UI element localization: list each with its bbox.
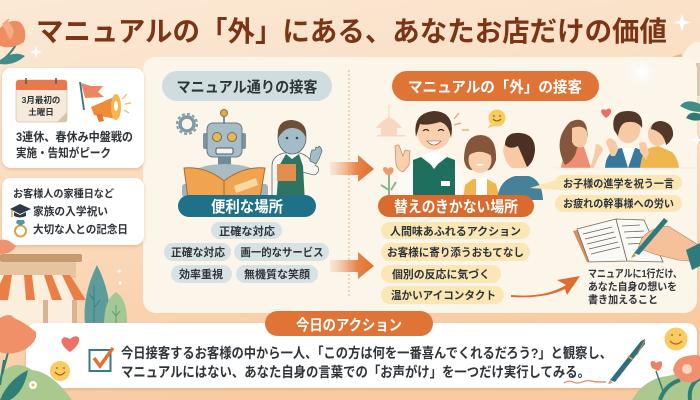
list: manual service tags: 無機質な笑顔 — [244, 267, 310, 281]
icon: temple silhouette — [376, 105, 405, 136]
list: human service tags: 個別の反応に気づく — [392, 267, 490, 281]
text: note to add to manual: あなた自身の想いを — [588, 280, 677, 293]
icon: palm leaves right — [680, 101, 700, 121]
list: manual service tags: 画一的なサービス — [240, 245, 324, 259]
icon: calendar: 3月最初の — [22, 95, 60, 105]
pill: action heading: 今日のアクション — [296, 316, 402, 334]
icon: building top right — [662, 42, 700, 97]
list: human service tags: 温かいアイコンタクト — [391, 288, 496, 302]
text: date note — [16, 129, 133, 160]
icon: shop — [0, 240, 86, 325]
list: manual service tags: 正確な対応 — [219, 224, 275, 238]
list: manual service tags — [164, 222, 329, 283]
list: human service tags: 人間味あふれるアクション — [390, 224, 521, 238]
callout: example phrases: お疲れの幹事様への労い — [563, 197, 674, 210]
icon: bottom-right flowers — [632, 355, 700, 400]
text: date note: 実施・告知がピーク — [16, 145, 111, 160]
arrow: upper — [330, 155, 374, 182]
icon: gear — [177, 114, 197, 134]
icon: megaphone — [91, 94, 131, 122]
icon: smile left — [50, 361, 70, 381]
icon: checkbox — [90, 348, 113, 371]
right column heading pill: マニュアルの「外」の接客 — [408, 78, 582, 96]
illustration: family conversation — [555, 108, 697, 168]
text: anniversary: 大切な人との記念日 — [33, 222, 128, 236]
left column heading pill: マニュアル通りの接客 — [176, 78, 318, 96]
banner: irreplaceable place — [378, 195, 534, 217]
decoration: sound lines, smile bubble and flower — [381, 110, 506, 195]
panel: date card — [2, 68, 144, 168]
text: note to add to manual — [588, 267, 682, 306]
callout: example phrases: お子様の進学を祝う一言 — [563, 177, 674, 190]
icon: graduation cap — [10, 204, 31, 218]
icon: sparkle in panel — [625, 56, 657, 88]
text: action body — [121, 345, 612, 380]
panel: main comparison — [143, 56, 697, 313]
text: action body: 今日接客するお客様の中から一人、「この方は何を一番喜んでくれるだろう?」と観察し、 — [121, 345, 612, 361]
banner: convenient place — [178, 195, 316, 217]
text: note to add to manual: マニュアルに1行だけ、 — [588, 267, 682, 280]
icon: smile right — [664, 328, 688, 350]
banner: irreplaceable place: 替えのきかない場所 — [394, 198, 518, 216]
illustration: man customer — [497, 133, 543, 200]
text: card heading: お客様人の家種日など — [13, 187, 114, 200]
arrow: curved to notebook — [511, 276, 580, 297]
icon: calendar: 土曜日 — [28, 107, 54, 117]
panel: anniversary card — [2, 178, 144, 245]
icon: pen and squiggle — [564, 339, 645, 384]
icon: trees — [84, 265, 127, 325]
list: human service tags: お客様に寄り添うおもてなし — [387, 245, 524, 259]
list: human service tags — [381, 222, 530, 304]
text: family: 家族の入学祝い — [33, 204, 108, 218]
title: マニュアルの「外」にある、あなたお店だけの価値 — [36, 16, 667, 47]
banner: convenient place: 便利な場所 — [211, 198, 283, 216]
illustration: smiling staff member — [395, 111, 466, 201]
icon: open notebook and hand — [573, 218, 700, 270]
icon: calendar — [16, 78, 67, 122]
pill: action heading — [265, 311, 433, 336]
callout: example phrases — [530, 175, 682, 212]
panel: today's action — [26, 311, 697, 388]
icon: ring — [15, 220, 26, 236]
illustration: robot with book — [182, 110, 268, 198]
icon: heart — [61, 336, 79, 352]
icon: side sparkle — [691, 134, 700, 146]
text: note to add to manual: 書き加えること — [588, 293, 658, 306]
icon: sparkles — [30, 14, 690, 58]
right column heading pill — [392, 71, 599, 101]
arrow: lower — [330, 252, 374, 279]
left column heading pill — [162, 71, 332, 101]
icon: bottom-left tulips — [0, 315, 72, 400]
list: manual service tags: 正確な対応 — [171, 245, 225, 259]
list: manual service tags: 効率重視 — [179, 267, 223, 281]
icon: flag — [80, 82, 104, 110]
text: action body: マニュアルにはない、あなた自身の言葉での「お声がけ」を一つだけ実行してみる。 — [121, 364, 590, 380]
illustration: woman customer — [463, 135, 500, 200]
icon: top-left flower — [0, 18, 25, 64]
text: date note: 3連休、春休み中盤戦の — [16, 129, 133, 144]
illustration: robotic staff member — [272, 120, 322, 204]
